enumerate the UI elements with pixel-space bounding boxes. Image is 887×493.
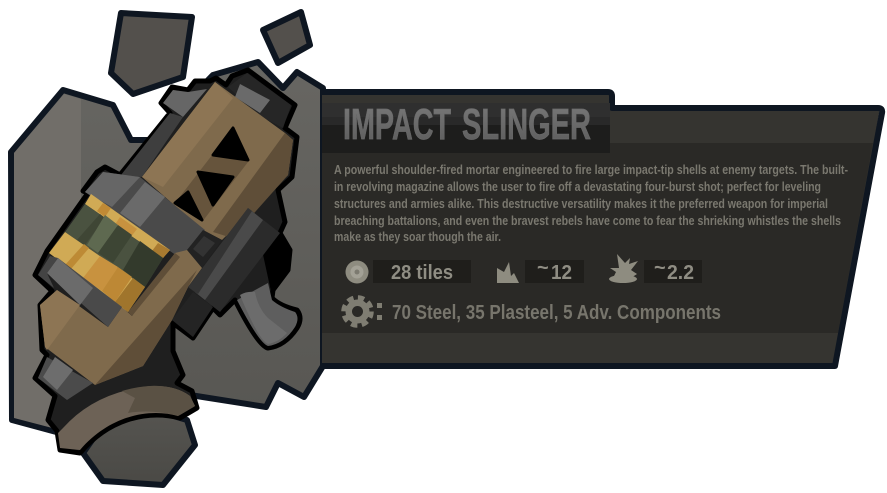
gray collar xyxy=(85,172,205,258)
muzzle cap right xyxy=(228,73,291,128)
upper yellow stripe xyxy=(85,194,170,258)
title bar xyxy=(322,100,610,153)
stat: damage xyxy=(497,257,584,284)
stat: blast radius xyxy=(609,254,702,284)
weapon silhouette xyxy=(35,70,300,453)
gray collar lower xyxy=(38,256,122,327)
grip xyxy=(237,283,298,346)
black cavity xyxy=(262,232,290,296)
panel: weapon description xyxy=(322,92,882,366)
crafting cost xyxy=(344,298,721,324)
rock: floating shard small xyxy=(263,12,310,63)
center block xyxy=(187,230,222,268)
side rail xyxy=(172,208,280,337)
icon: range target xyxy=(346,260,368,284)
stat: blast radius: 2.2 xyxy=(667,262,694,284)
rock: bottom hexagon xyxy=(83,400,195,485)
rock: floating shard large xyxy=(111,13,192,94)
title: IMPACT xyxy=(343,100,451,149)
description text: make as they soar though the air. xyxy=(334,229,501,244)
brown housing upper xyxy=(142,82,293,240)
icon: small blast xyxy=(497,262,519,283)
title: SLINGER xyxy=(462,100,591,149)
stat: range: 28 tiles xyxy=(391,262,453,284)
green shell section xyxy=(65,204,163,287)
barrel side panel xyxy=(121,113,183,177)
stat: damage: 12 xyxy=(551,262,572,284)
curved stock xyxy=(58,386,195,450)
muzzle cap left xyxy=(163,89,207,117)
lower stub xyxy=(38,357,93,400)
icon: explosion xyxy=(609,254,638,283)
weapon: impact slinger xyxy=(35,70,300,453)
stat: blast radius: ~ xyxy=(654,257,666,279)
brown housing lower xyxy=(40,250,202,385)
ammo band xyxy=(49,194,170,312)
title xyxy=(343,100,591,149)
lower yellow stripe xyxy=(49,232,145,312)
stat: damage: ~ xyxy=(537,257,549,279)
icon: gear xyxy=(344,298,370,324)
crafting cost: 70 Steel, 35 Plasteel, 5 Adv. Components xyxy=(392,302,721,324)
description text xyxy=(334,162,848,244)
stat: range xyxy=(346,260,471,284)
back rock formation xyxy=(11,62,323,433)
